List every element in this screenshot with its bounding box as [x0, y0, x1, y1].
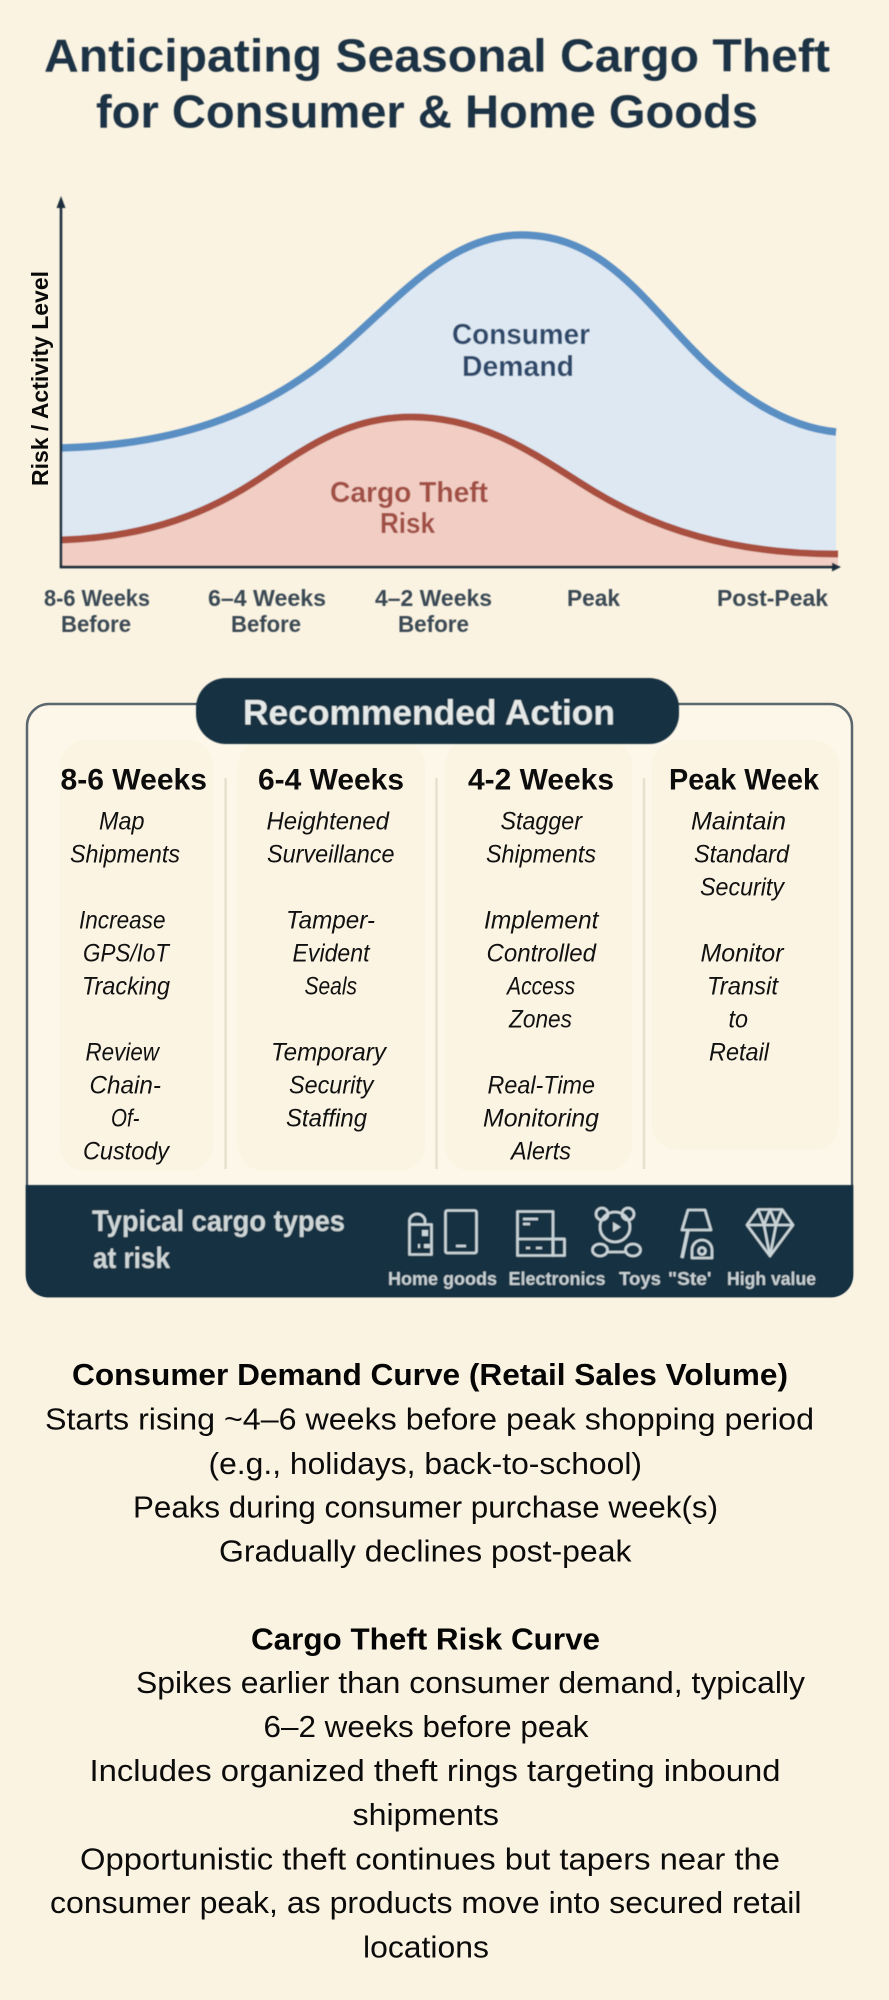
column: 4-2 weeks: Zones: [508, 1006, 572, 1034]
column: 4-2 weeks: Real-Time: [488, 1072, 595, 1100]
heading pill: Recommended Action: [243, 694, 615, 732]
icon labels: Home goods: [388, 1269, 497, 1289]
text block: consumer demand curve: Consumer Demand Curve (Retail Sales Volume): [72, 1357, 788, 1392]
text block: cargo theft risk curve: Spikes earlier than consumer demand, typically: [136, 1665, 806, 1700]
column: 8-6 weeks: Custody: [83, 1138, 170, 1166]
panel frame: [27, 704, 852, 1296]
column: 4-2 weeks: [468, 764, 614, 1166]
icon labels: High value: [727, 1269, 816, 1289]
text block: cargo theft risk curve: [50, 1622, 806, 1964]
bar label: at risk: [93, 1242, 170, 1275]
label: consumer demand: [452, 319, 590, 383]
cargo types bar: [26, 1185, 853, 1297]
x axis labels: Before: [231, 611, 301, 637]
column: peak week: Peak Week: [669, 764, 819, 796]
column: peak week: Retail: [709, 1038, 770, 1066]
column: peak week: [669, 764, 819, 1066]
icon labels: Electronics: [508, 1269, 606, 1289]
y axis arrow: [56, 196, 66, 567]
text block: cargo theft risk curve: shipments: [352, 1797, 499, 1832]
x axis labels: 4–2 Weeks: [375, 585, 492, 611]
column: 8-6 weeks: [60, 764, 207, 1166]
column: 6-4 weeks: Security: [289, 1072, 375, 1100]
column: 4-2 weeks: Implement: [484, 906, 600, 934]
column: 8-6 weeks: Increase: [79, 906, 166, 934]
icon labels: [388, 1269, 816, 1289]
icon: home goods: [410, 1210, 476, 1254]
label: cargo theft risk: [330, 477, 488, 540]
column: 8-6 weeks: Tracking: [82, 972, 170, 1000]
column: 8-6 weeks: Map: [99, 808, 145, 836]
x axis labels: Before: [398, 611, 469, 637]
column: 6-4 weeks: Heightened: [266, 808, 390, 836]
column cards: [60, 740, 839, 1171]
bar label: Typical cargo types: [92, 1205, 345, 1238]
x axis labels: [44, 585, 828, 637]
title: [44, 30, 830, 138]
column: peak week: Standard: [694, 840, 790, 868]
column: 8-6 weeks: Review: [86, 1038, 161, 1066]
column: 8-6 weeks: 8-6 Weeks: [60, 764, 207, 796]
column: 4-2 weeks: Monitoring: [483, 1104, 599, 1132]
icon labels: Toys: [619, 1269, 661, 1289]
column: 8-6 weeks: Chain-: [90, 1072, 161, 1100]
column: 8-6 weeks: Shipments: [70, 840, 180, 868]
column: 4-2 weeks: Access: [505, 972, 575, 1000]
icon: high value diamond: [747, 1210, 793, 1256]
x axis labels: Peak: [567, 585, 620, 611]
column: peak week: Transit: [707, 972, 779, 1000]
column: peak week: Security: [700, 874, 785, 902]
label: consumer demand: Consumer: [452, 319, 590, 351]
icon: toys: [592, 1208, 640, 1256]
icon: lamp: [682, 1210, 712, 1258]
line: cargo theft risk curve: [61, 417, 838, 554]
column: 4-2 weeks: Shipments: [486, 840, 596, 868]
text block: consumer demand curve: (e.g., holidays, back-to-school): [208, 1446, 642, 1481]
title: for Consumer & Home Goods: [96, 86, 758, 138]
icon: electronics: [518, 1212, 564, 1256]
column: peak week: Monitor: [700, 940, 785, 968]
line: consumer demand curve: [61, 235, 836, 448]
x axis arrow: [60, 562, 841, 572]
bar label: [92, 1205, 345, 1275]
column: peak week: Maintain: [691, 808, 786, 836]
column: 4-2 weeks: Controlled: [486, 940, 597, 968]
text block: cargo theft risk curve: locations: [363, 1930, 489, 1964]
column: 6-4 weeks: Temporary: [271, 1038, 387, 1066]
label: cargo theft risk: Risk: [380, 508, 436, 540]
column: 6-4 weeks: Seals: [304, 972, 357, 1000]
panel: recommended action: [26, 678, 853, 1297]
column: peak week: to: [728, 1006, 748, 1034]
column: 6-4 weeks: Tamper-: [286, 906, 375, 934]
text block: cargo theft risk curve: 6–2 weeks before peak: [264, 1709, 589, 1744]
icon labels: "Ste': [668, 1269, 712, 1289]
title: Anticipating Seasonal Cargo Theft: [44, 30, 830, 82]
column: 6-4 weeks: Evident: [292, 940, 370, 968]
x axis labels: 8-6 Weeks: [44, 585, 150, 611]
chart: demand and theft risk curves: [27, 196, 841, 637]
label: consumer demand: Demand: [462, 351, 574, 383]
x axis labels: Post-Peak: [717, 585, 828, 611]
text block: consumer demand curve: Gradually declines post-peak: [219, 1534, 632, 1568]
text block: consumer demand curve: [45, 1357, 814, 1568]
column: 8-6 weeks: GPS/IoT: [83, 940, 171, 968]
text block: consumer demand curve: Peaks during consumer purchase week(s): [133, 1490, 718, 1524]
y axis label: Risk / Activity Level: [27, 271, 53, 486]
x axis labels: Before: [61, 611, 131, 637]
area: consumer demand: [61, 235, 836, 567]
column: 6-4 weeks: Surveillance: [267, 840, 394, 868]
x axis labels: 6–4 Weeks: [208, 585, 326, 611]
text block: cargo theft risk curve: Cargo Theft Risk Curve: [251, 1622, 600, 1656]
column: 6-4 weeks: Staffing: [286, 1104, 367, 1132]
column: 8-6 weeks: Of-: [111, 1104, 140, 1132]
text block: cargo theft risk curve: Includes organized theft rings targeting inbound: [90, 1753, 780, 1788]
area: cargo theft risk: [61, 417, 838, 567]
text block: consumer demand curve: Starts rising ~4–6 weeks before peak shopping period: [45, 1402, 814, 1436]
column: 4-2 weeks: Alerts: [509, 1138, 571, 1166]
column: 6-4 weeks: 6-4 Weeks: [258, 764, 404, 796]
column: 4-2 weeks: Stagger: [500, 808, 584, 836]
label: cargo theft risk: Cargo Theft: [330, 477, 488, 509]
column: 4-2 weeks: 4-2 Weeks: [468, 764, 614, 796]
text block: cargo theft risk curve: Opportunistic theft continues but tapers near the: [80, 1842, 780, 1876]
heading pill: [196, 678, 679, 744]
column: 6-4 weeks: [258, 764, 404, 1132]
text block: cargo theft risk curve: consumer peak, as products move into secured retail: [50, 1885, 802, 1920]
